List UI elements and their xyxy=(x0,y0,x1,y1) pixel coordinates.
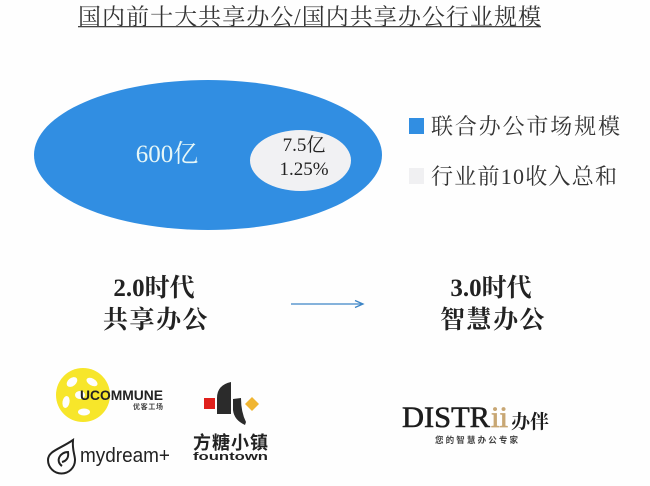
icon: red square xyxy=(204,398,215,409)
label: 1.25%: 1.25% xyxy=(279,159,329,180)
legend label: market size: 联合办公市场规模 xyxy=(431,114,620,139)
logo: DISTRii xyxy=(402,401,549,445)
title: 国内前十大共享办公/国内共享办公行业规模 xyxy=(78,4,541,30)
logo: Fountown: 方糖小镇 xyxy=(193,432,268,453)
icon: black strokes xyxy=(217,382,246,425)
icon: yellow faceted ball xyxy=(56,368,110,422)
chart: nested ellipses of market size xyxy=(34,80,382,230)
logo: Fountown: fountown xyxy=(193,451,268,463)
icon: orange diamond xyxy=(245,397,259,411)
logo: DISTRii: 您的智慧办公专家 xyxy=(435,435,518,445)
heading: 2.0 era: 共享办公 xyxy=(103,306,209,334)
arrow xyxy=(291,300,363,308)
label: 600亿: 600亿 xyxy=(136,140,198,168)
legend swatch: grey xyxy=(409,168,424,184)
heading: 3.0 era xyxy=(440,274,546,334)
legend swatch: blue xyxy=(409,118,424,134)
heading: 2.0 era: 2.0时代 xyxy=(113,274,195,302)
logo: UCOMMUNE xyxy=(56,368,163,422)
inner ellipse: top 10 revenue xyxy=(250,130,351,191)
logo: UCOMMUNE: UCOMMUNE xyxy=(80,387,163,403)
heading: 3.0 era: 3.0时代 xyxy=(450,274,532,302)
logo: Fountown xyxy=(193,382,268,463)
logo: mydream+ xyxy=(48,440,170,474)
logo: mydream+: mydream+ xyxy=(80,445,170,467)
logo: DISTRii: 办伴 xyxy=(511,411,549,433)
logo: UCOMMUNE: 优客工场 xyxy=(133,402,163,411)
icon: drop xyxy=(48,440,75,474)
heading: 3.0 era: 智慧办公 xyxy=(440,306,546,334)
outer ellipse: shared office market xyxy=(34,80,382,230)
label: 7.5亿: 7.5亿 xyxy=(283,134,325,156)
logo: DISTRii: ii xyxy=(491,401,508,434)
heading: 2.0 era xyxy=(103,274,209,334)
legend xyxy=(409,114,620,189)
legend label: top 10 revenue: 行业前10收入总和 xyxy=(431,164,617,189)
logo: DISTRii: DISTR xyxy=(402,401,490,434)
